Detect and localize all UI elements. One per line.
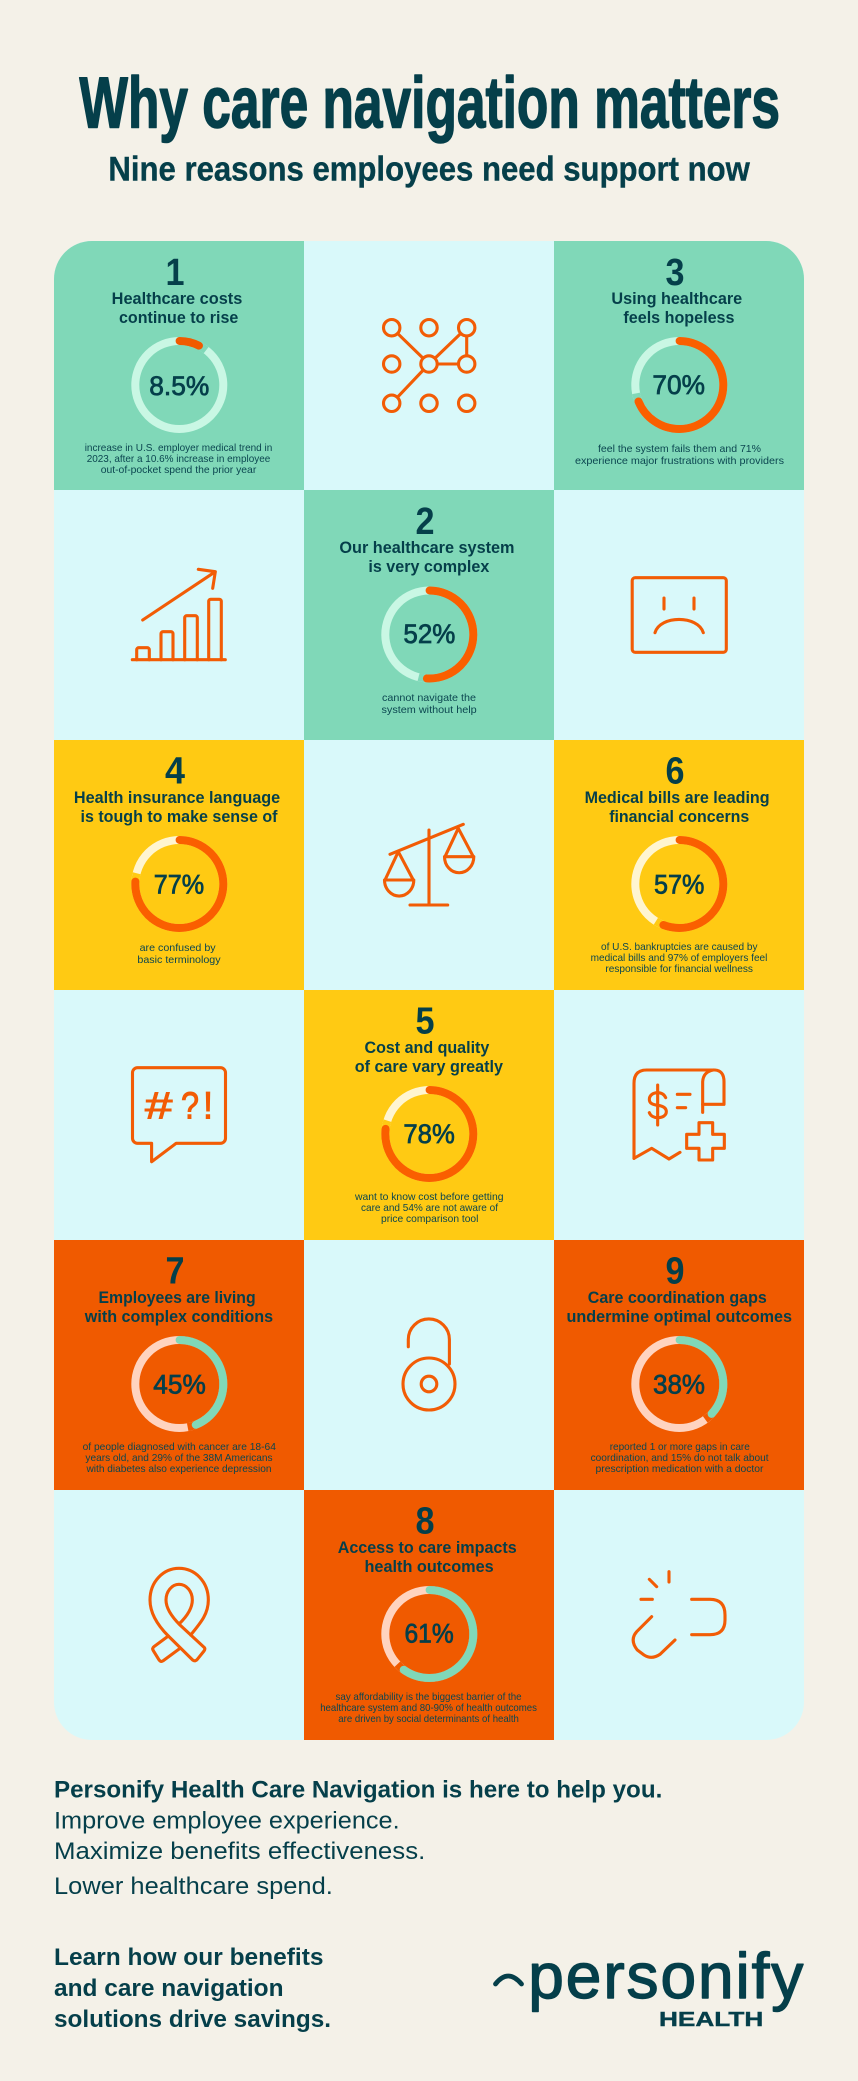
icon: medical bill with cross: [634, 1070, 724, 1160]
text block: learn how: [54, 1944, 331, 2033]
heading: reason 7: Employees are living: [98, 1289, 256, 1307]
panel: reason 5: [304, 990, 554, 1240]
heading: reason 5: of care vary greatly: [355, 1058, 503, 1076]
caption: reason 1: out-of-pocket spend the prior year: [101, 465, 257, 476]
caption: reason 1: [85, 443, 273, 476]
icon: balance scales: [384, 824, 474, 905]
text block: learn how: and care navigation: [54, 1975, 284, 2002]
call to action: care navigation benefits: [54, 1776, 662, 1900]
donut chart: 61%: 61%: [404, 1619, 454, 1649]
caption: reason 9: coordination, and 15% do not talk about: [591, 1453, 769, 1464]
caption: reason 6: medical bills and 97% of employers feel: [591, 953, 767, 964]
caption: reason 3: experience major frustrations with providers: [575, 456, 784, 467]
caption: reason 9: [591, 1442, 769, 1475]
heading: reason 6: financial concerns: [609, 808, 749, 826]
donut chart: 70%: [635, 341, 723, 429]
heading: reason 1: Healthcare costs: [112, 290, 242, 308]
caption: reason 1: 2023, after a 10.6% increase in employee: [87, 454, 271, 465]
panel: nine reasons grid: [54, 241, 804, 1740]
donut chart: 8.5%: [135, 341, 223, 429]
logo: Personify Health: HEALTH: [659, 2009, 763, 2031]
caption: reason 3: [575, 444, 784, 467]
icon: awareness ribbon: [150, 1568, 208, 1661]
number 2: 2: [416, 501, 434, 543]
caption: reason 6: of U.S. bankruptcies are caused by: [601, 942, 758, 953]
call to action: care navigation benefits: Personify Health Care Navigation is here to help you.: [54, 1776, 662, 1803]
number 5: 5: [416, 1000, 434, 1042]
donut chart: 57%: [635, 840, 723, 928]
caption: reason 7: with diabetes also experience depression: [86, 1464, 272, 1475]
donut chart: 52%: 52%: [403, 619, 455, 649]
icon: speech bubble with symbols: [132, 1068, 226, 1162]
caption: reason 8: are driven by social determinants of health: [338, 1714, 519, 1725]
donut chart: 8.5%: 8.5%: [149, 371, 209, 401]
heading: reason 3: feels hopeless: [623, 309, 734, 327]
panel: reason 7: [54, 1240, 304, 1490]
heading: reason 4: [74, 789, 280, 826]
call to action: care navigation benefits: Maximize benefits effectiveness.: [54, 1838, 425, 1865]
caption: reason 8: healthcare system and 80-90% of health outcomes: [320, 1703, 537, 1714]
heading: reason 8: Access to care impacts: [338, 1539, 517, 1557]
donut chart: 70%: 70%: [652, 370, 705, 400]
icon: rising bar chart with arrow: [132, 569, 225, 660]
caption: reason 5: [354, 1192, 504, 1225]
panel: reason 3: [554, 241, 804, 490]
call to action: care navigation benefits: Lower healthcare spend.: [54, 1873, 333, 1900]
heading: reason 3: [611, 290, 742, 327]
panel: reason 4: [54, 740, 304, 990]
panel: reason 1: [54, 241, 304, 490]
donut chart: 45%: [135, 1340, 223, 1428]
panel: reason 9: [554, 1240, 804, 1490]
heading: reason 6: Medical bills are leading: [585, 789, 770, 807]
heading: reason 4: Health insurance language: [74, 789, 280, 807]
caption: reason 2: [382, 693, 477, 716]
caption: reason 6: responsible for financial wellness: [605, 964, 753, 975]
caption: reason 7: of people diagnosed with cancer are 18-64: [83, 1442, 276, 1453]
icon: speech bubble with symbols: ?: [181, 1085, 199, 1127]
heading: reason 4: is tough to make sense of: [80, 808, 278, 826]
caption: reason 5: want to know cost before getting: [354, 1192, 504, 1203]
caption: reason 7: [83, 1442, 276, 1475]
donut chart: 77%: 77%: [154, 869, 204, 899]
donut chart: 38%: [635, 1340, 723, 1428]
caption: reason 8: say affordability is the biggest barrier of the: [336, 1692, 522, 1703]
heading: reason 1: [112, 292, 242, 323]
heading: reason 2: [339, 539, 514, 576]
donut chart: 38%: 38%: [653, 1369, 705, 1399]
heading: reason 8: [338, 1539, 517, 1576]
caption: reason 2: cannot navigate the: [382, 693, 476, 704]
heading: reason 5: Cost and quality: [364, 1039, 489, 1057]
number 8: 8: [416, 1500, 434, 1542]
icon: broken chain link: [633, 1572, 725, 1657]
caption: reason 5: price comparison tool: [381, 1214, 478, 1225]
panel: reason 8: [304, 1490, 554, 1740]
caption: reason 7: years old, and 29% of the 38M Americans: [85, 1453, 273, 1464]
heading: reason 6: [586, 791, 768, 822]
heading: reason 2: is very complex: [368, 558, 489, 576]
icon: open padlock: [403, 1319, 455, 1410]
icon: speech bubble with symbols: #: [145, 1085, 172, 1127]
caption: reason 4: basic terminology: [137, 955, 221, 966]
donut chart: 45%: 45%: [153, 1369, 206, 1399]
heading: reason 7: with complex conditions: [84, 1308, 273, 1326]
heading: reason 1: continue to rise: [119, 309, 238, 327]
caption: reason 5: care and 54% are not aware of: [361, 1203, 498, 1214]
number 1: 1: [166, 252, 184, 294]
caption: reason 9: reported 1 or more gaps in care: [610, 1442, 750, 1453]
number 7: 7: [166, 1250, 184, 1292]
caption: reason 4: [137, 943, 221, 966]
donut chart: 52%: [385, 590, 473, 678]
caption: reason 9: prescription medication with a doctor: [596, 1464, 764, 1475]
subtitle: Nine reasons employees need support now: [108, 151, 750, 189]
heading: reason 2: Our healthcare system: [339, 539, 514, 557]
donut chart: 77%: [135, 840, 223, 928]
logo: Personify Health: personify: [528, 1940, 803, 2012]
number 4: 4: [165, 750, 185, 792]
panel: reason 2: [304, 490, 554, 740]
caption: reason 8: [320, 1692, 537, 1725]
panel: reason 6: [554, 740, 804, 990]
caption: reason 1: increase in U.S. employer medical trend in: [85, 443, 273, 454]
caption: reason 6: [591, 942, 767, 975]
donut chart: 78%: [385, 1090, 473, 1178]
heading: reason 7: [84, 1289, 273, 1326]
icon: connected network dots: [384, 320, 475, 411]
icon: frowning face square: [632, 578, 726, 652]
number 6: 6: [666, 750, 684, 792]
caption: reason 4: are confused by: [140, 943, 216, 954]
call to action: care navigation benefits: Improve employee experience.: [54, 1808, 400, 1834]
number 9: 9: [666, 1250, 684, 1292]
heading: reason 9: undermine optimal outcomes: [566, 1308, 792, 1326]
heading: reason 9: Care coordination gaps: [588, 1289, 767, 1307]
number 3: 3: [666, 252, 684, 294]
donut chart: 57%: 57%: [654, 869, 704, 899]
heading: reason 8: health outcomes: [364, 1558, 494, 1576]
heading: reason 5: [355, 1039, 503, 1076]
text block: learn how: Learn how our benefits: [54, 1944, 324, 1971]
heading: reason 3: Using healthcare: [611, 290, 742, 308]
caption: reason 2: system without help: [382, 705, 477, 716]
heading: reason 9: [566, 1289, 792, 1326]
text block: learn how: solutions drive savings.: [54, 2006, 331, 2033]
icon: speech bubble with symbols: !: [203, 1085, 213, 1127]
donut chart: 61%: [385, 1590, 473, 1678]
donut chart: 78%: 78%: [403, 1119, 455, 1149]
caption: reason 3: feel the system fails them and 71%: [598, 444, 761, 455]
